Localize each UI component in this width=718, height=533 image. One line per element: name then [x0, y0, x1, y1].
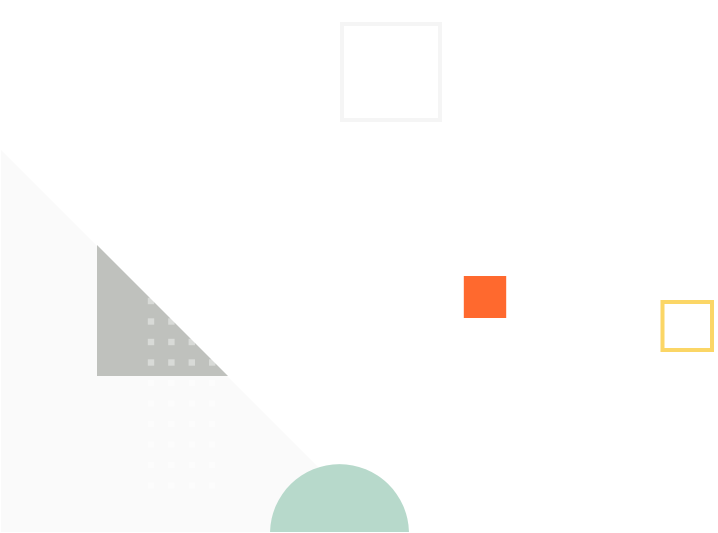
- dot grid: [148, 298, 215, 489]
- shape: pale grey square outline: [342, 24, 440, 120]
- shape: mint semicircle: [270, 464, 409, 532]
- shape: large pale triangle: [1, 150, 383, 532]
- shape: dark grey triangle: [97, 245, 228, 376]
- shape: yellow square outline: [662, 302, 712, 350]
- shape: orange square: [464, 276, 506, 318]
